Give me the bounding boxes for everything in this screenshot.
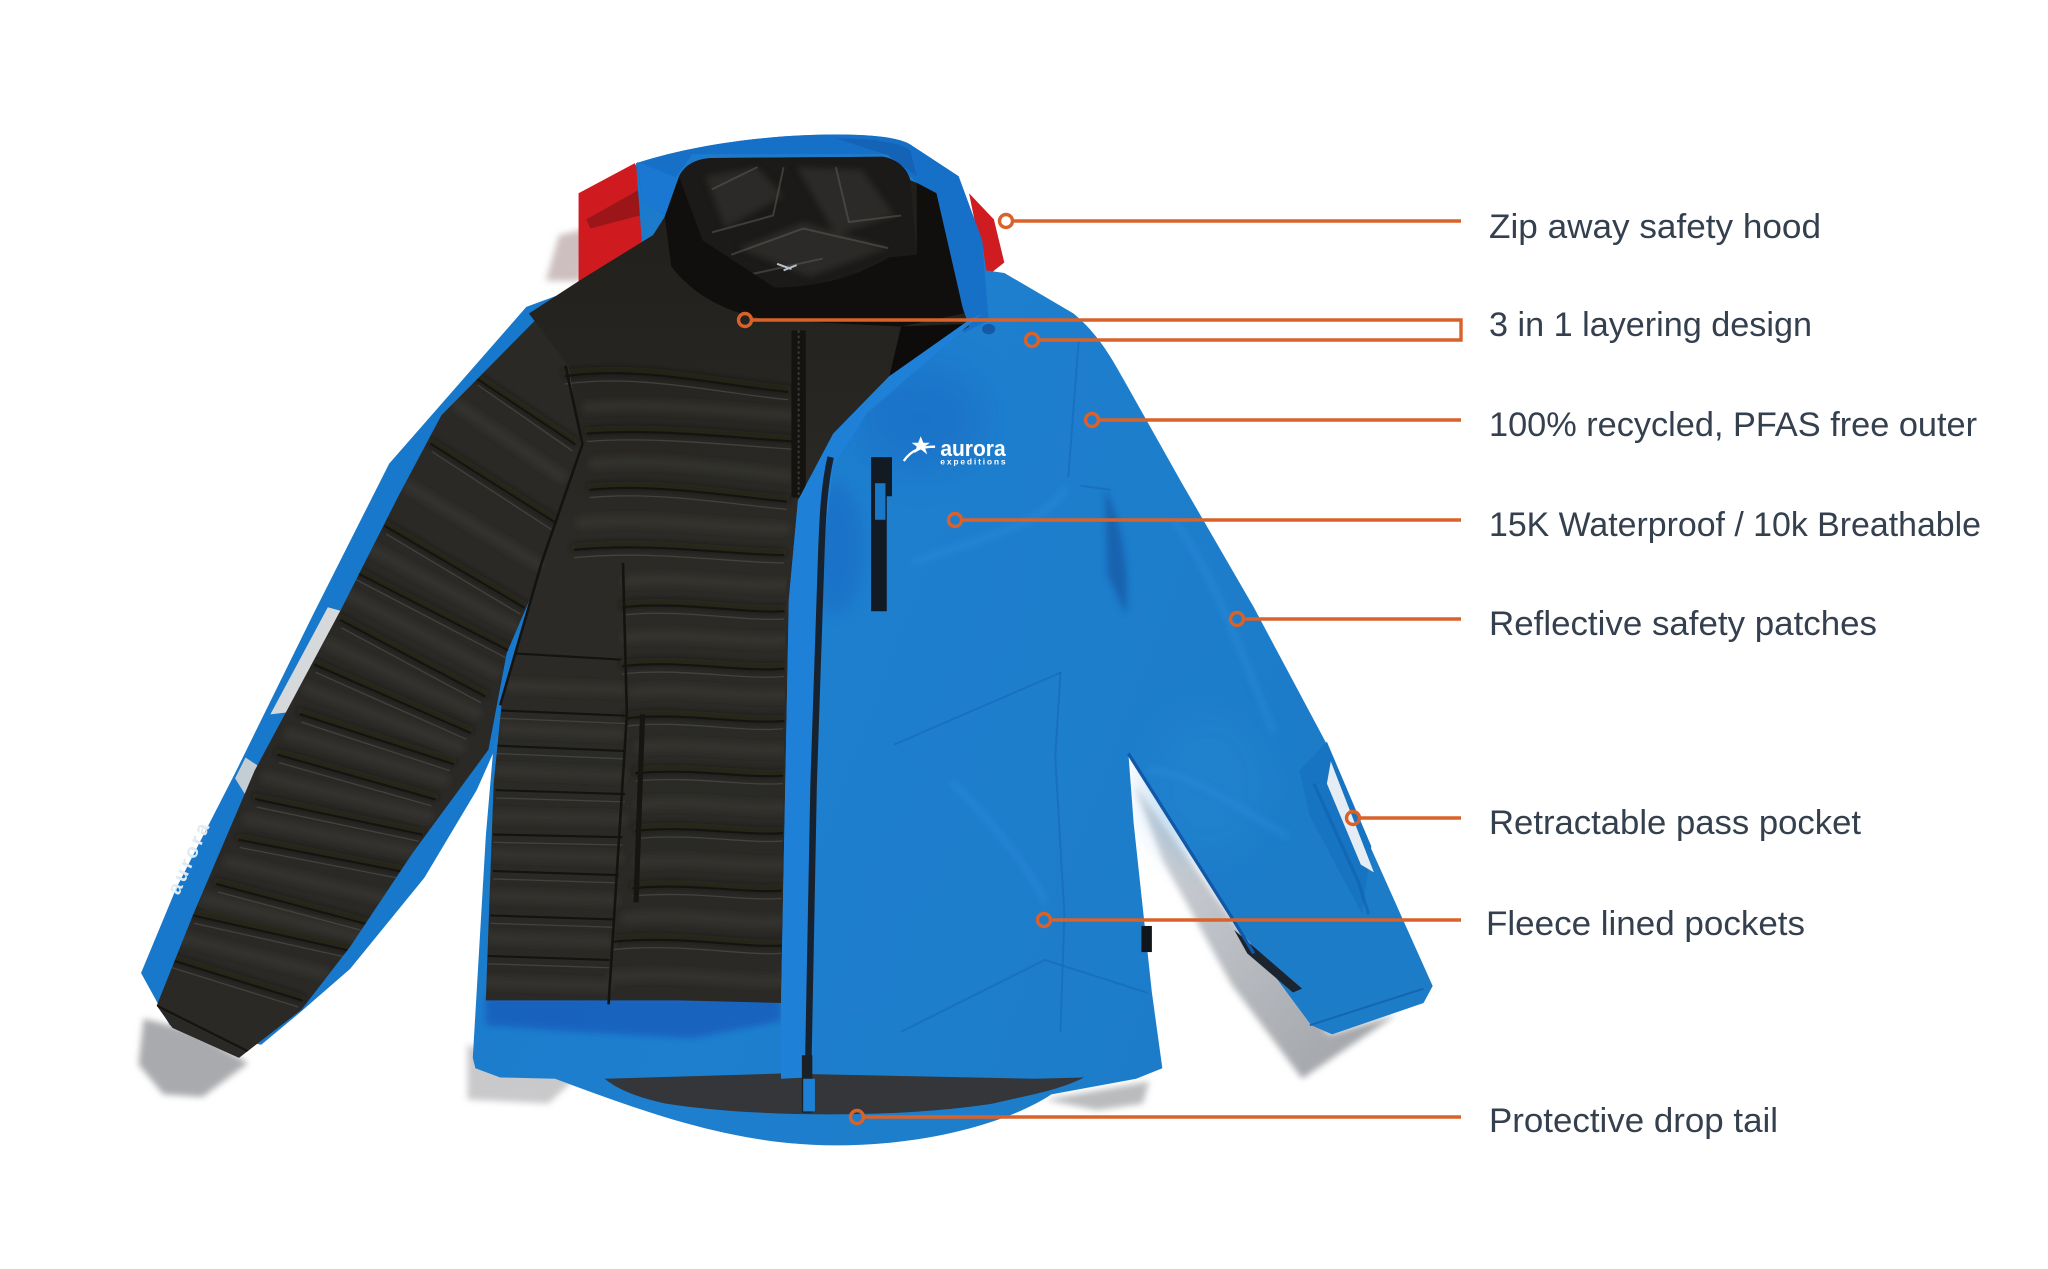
collar neck roll: [665, 176, 964, 326]
sleeve quilting: [157, 376, 575, 1051]
callout: waterproof and breathable: 15K Waterproof / 10k Breathable: [1489, 506, 1981, 544]
hood rim: [636, 135, 989, 333]
callout: reflective safety patches: Reflective safety patches: [1489, 605, 1877, 643]
callout: recycled outer: 100% recycled, PFAS free outer: [1489, 406, 1977, 444]
infographic canvas: [135, 134, 1980, 1146]
callout: protective drop tail: [850, 1102, 1778, 1140]
liner body: [486, 157, 969, 1003]
cast shadows: [138, 229, 1396, 1110]
hem inner lining: [605, 1074, 1084, 1114]
jacket illustration: [138, 135, 1433, 1145]
reflective patch: left sleeve: [270, 607, 342, 714]
callout: 3 in 1 layering design: 3 in 1 layering design: [1489, 306, 1812, 344]
outer jacket shell: [473, 135, 1433, 1145]
chest pocket zipper: [871, 457, 892, 611]
sleeve print: aurora: [163, 819, 215, 898]
liner zipper: [791, 330, 806, 498]
left sleeve outer shell: [141, 294, 575, 1045]
callout: waterproof and breathable: [948, 506, 1981, 544]
callout: fleece lined pockets: [1038, 905, 1805, 943]
hood red lining: [579, 163, 1004, 282]
callout: 3 in 1 layering design: [738, 306, 1812, 346]
armpit shadow: [1105, 490, 1127, 614]
cuff slit: [1234, 930, 1302, 993]
logo: aurora expeditions: aurora: [940, 436, 1006, 461]
callout: retractable pass pocket: Retractable pass pocket: [1489, 804, 1862, 842]
callout: zip away safety hood: [1000, 208, 1821, 246]
front placket: [781, 313, 995, 1113]
collar inner folds: [679, 157, 917, 287]
callout: protective drop tail: Protective drop tail: [1489, 1102, 1778, 1140]
callout: recycled outer: [1086, 406, 1977, 444]
shadows on chest and sleeve: [855, 366, 986, 470]
callout: reflective safety patches: [1230, 605, 1877, 643]
liner seams and pocket: [500, 366, 582, 705]
fold lines: [895, 673, 1060, 744]
hem tag: [1141, 926, 1152, 952]
main zipper: [808, 457, 831, 1058]
inner shell panel shadow: [486, 995, 781, 1038]
logo: aurora expeditions: [904, 436, 1006, 466]
liner left sleeve: [157, 313, 581, 1058]
puffer liner: [157, 157, 969, 1058]
body quilting: [488, 371, 794, 986]
logo: aurora expeditions: expeditions: [940, 456, 1006, 466]
pass pocket and reflective cuff patch: [1299, 742, 1371, 914]
callout: zip away safety hood: Zip away safety hood: [1489, 208, 1821, 246]
callout: fleece lined pockets: Fleece lined pockets: [1486, 905, 1805, 943]
